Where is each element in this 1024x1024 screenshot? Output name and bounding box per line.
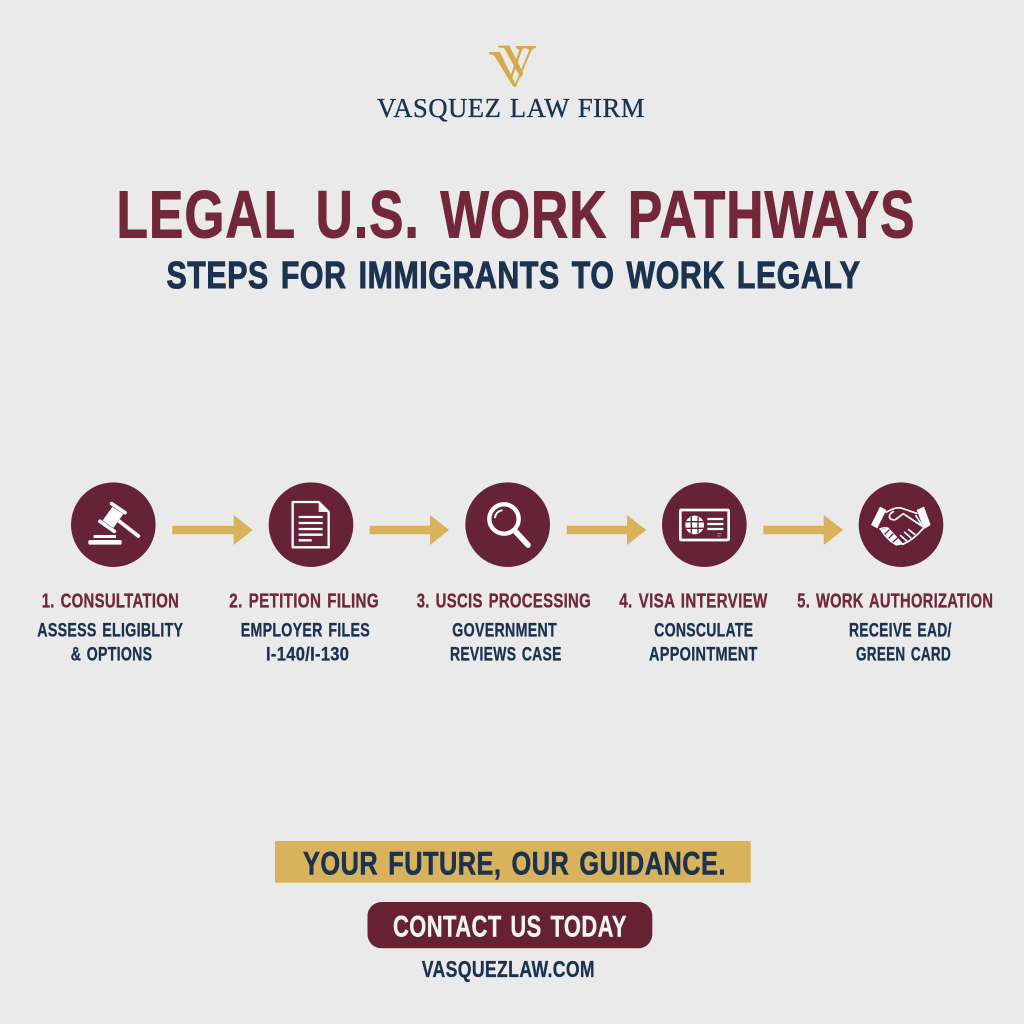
step description: APPOINTMENT — [649, 643, 758, 665]
step description: REVIEWS CASE — [450, 643, 562, 665]
step 5: work authorization — [797, 482, 993, 665]
step 4: visa interview — [619, 482, 768, 665]
step heading: 4. VISA INTERVIEW — [619, 590, 768, 612]
arrow 2 — [370, 515, 449, 545]
tagline banner — [275, 841, 751, 883]
step description: I-140/I-130 — [266, 643, 349, 665]
step description — [849, 620, 952, 665]
tagline banner: YOUR FUTURE, OUR GUIDANCE. — [303, 845, 726, 881]
website url: VASQUEZLAW.COM — [422, 956, 595, 982]
step description: & OPTIONS — [71, 643, 152, 665]
subtitle: STEPS FOR IMMIGRANTS TO WORK LEGALY — [166, 255, 860, 297]
icon: visa card — [662, 482, 747, 567]
contact button: CONTACT US TODAY — [393, 910, 627, 944]
step description: ASSESS ELIGIBLITY — [37, 620, 183, 642]
icon: magnifying glass — [465, 482, 550, 567]
arrow 3 — [567, 515, 646, 545]
step description: RECEIVE EAD/ — [849, 620, 952, 642]
step 1: consultation — [37, 482, 183, 665]
step heading: 2. PETITION FILING — [229, 590, 379, 612]
arrow 4 — [763, 515, 843, 545]
step description: CONSCULATE — [654, 620, 753, 642]
step description — [241, 620, 370, 665]
step 2: petition filing — [229, 482, 379, 665]
step description: EMPLOYER FILES — [241, 620, 370, 642]
step heading: 1. CONSULTATION — [42, 590, 179, 612]
step heading: 3. USCIS PROCESSING — [417, 590, 591, 612]
contact button — [368, 902, 652, 948]
step 3: USCIS processing — [417, 482, 591, 665]
step description — [450, 620, 562, 665]
step description: GREEN CARD — [856, 643, 951, 665]
icon: gavel — [71, 482, 156, 567]
logo: Vasquez Law Firm — [377, 46, 645, 123]
icon: document — [269, 482, 353, 567]
step description — [649, 620, 758, 665]
step description — [37, 620, 183, 665]
icon: handshake — [859, 482, 943, 567]
icon: gold W monogram — [489, 46, 536, 87]
firm name: VASQUEZ LAW FIRM — [377, 93, 645, 123]
step description: GOVERNMENT — [452, 620, 557, 642]
arrow 1 — [172, 515, 253, 545]
